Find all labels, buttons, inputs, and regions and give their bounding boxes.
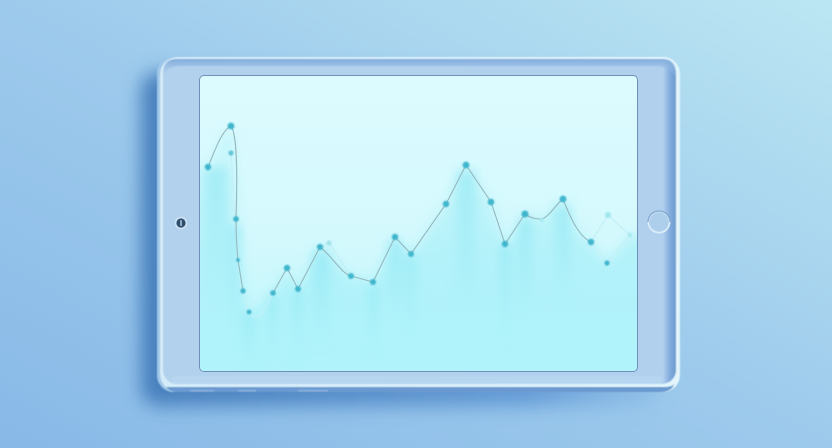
area fill under line bbox=[200, 132, 637, 371]
tablet shadow bbox=[141, 72, 661, 406]
bezel bbox=[163, 59, 676, 384]
main line bbox=[208, 126, 591, 293]
bezel lower highlight bbox=[172, 376, 662, 384]
front camera bbox=[175, 217, 187, 229]
side edge detail bbox=[190, 390, 328, 392]
faint secondary line bbox=[235, 217, 628, 318]
home button bbox=[648, 210, 670, 234]
bezel top inner shade bbox=[163, 59, 676, 78]
data points bbox=[205, 123, 632, 314]
left outer edge bbox=[157, 57, 178, 392]
peak streaks bbox=[202, 164, 574, 338]
tablet body bbox=[157, 57, 680, 392]
chart bbox=[190, 123, 650, 385]
bottom edge shading bbox=[166, 384, 674, 392]
screen bbox=[199, 75, 638, 372]
outer rim bbox=[157, 57, 680, 392]
